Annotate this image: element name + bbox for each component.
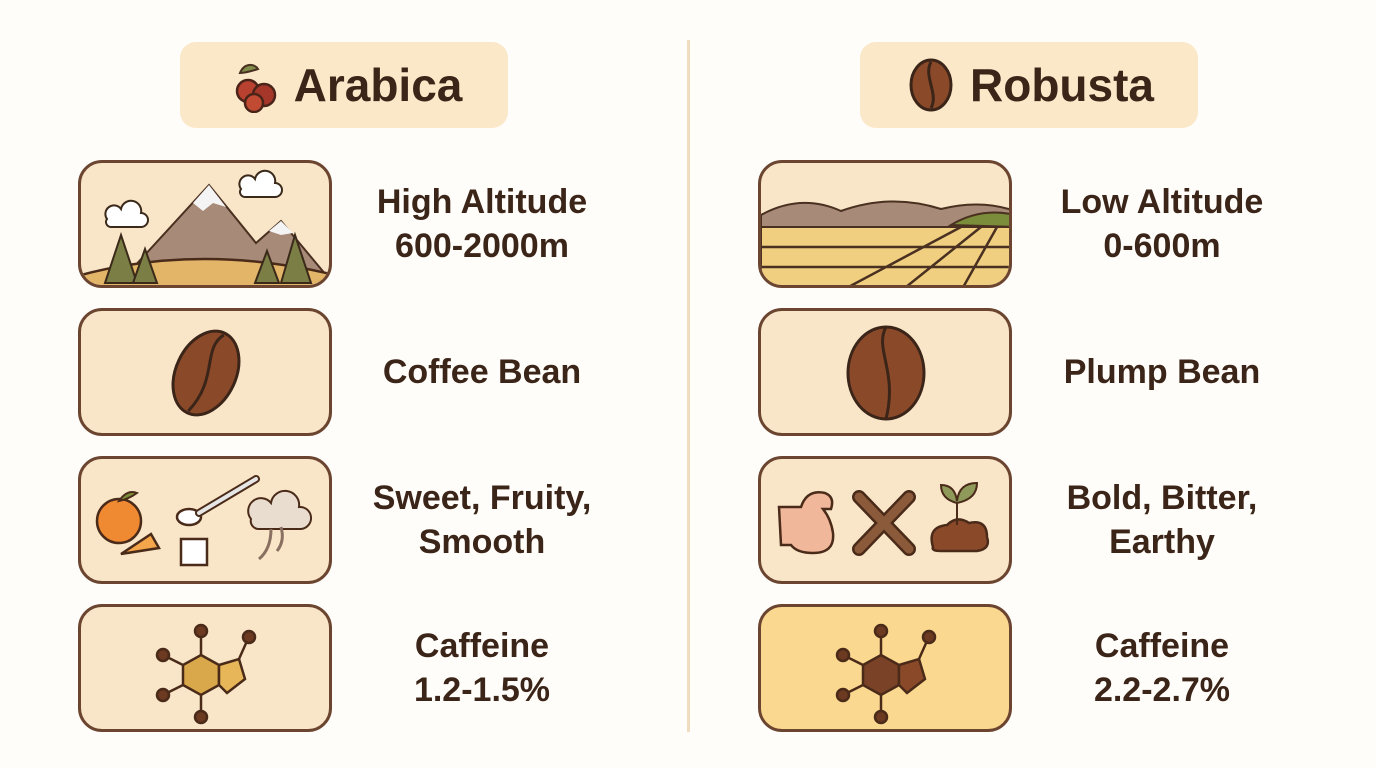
icon: bean: [910, 58, 952, 112]
text: flavor arabica: [373, 479, 591, 561]
text: plump bean: Plump Bean: [1064, 353, 1260, 391]
card: low altitude: [758, 160, 1012, 288]
text: flavor arabica: Smooth: [419, 523, 545, 561]
text: caffeine robusta: 2.2-2.7%: [1094, 671, 1230, 709]
card: flavor arabica: [78, 456, 332, 584]
text: caffeine robusta: Caffeine: [1095, 627, 1229, 665]
text: flavor robusta: Bold, Bitter,: [1067, 479, 1257, 517]
text: low altitude: Low Altitude: [1061, 183, 1263, 221]
text: caffeine arabica: [414, 627, 550, 709]
title: Arabica: [180, 42, 508, 128]
text: high altitude: High Altitude: [377, 183, 587, 221]
card: coffee bean: [78, 308, 332, 436]
text: high altitude: [377, 183, 587, 265]
text: caffeine arabica: Caffeine: [415, 627, 549, 665]
card: high altitude: [78, 160, 332, 288]
card: caffeine arabica: [78, 604, 332, 732]
title: Robusta: Robusta: [970, 59, 1154, 111]
text: flavor arabica: Sweet, Fruity,: [373, 479, 591, 517]
text: high altitude: 600-2000m: [395, 227, 569, 265]
icon: coffee cherries: [236, 64, 276, 113]
title: Arabica: Arabica: [294, 59, 462, 111]
text: low altitude: 0-600m: [1103, 227, 1221, 265]
text: flavor robusta: [1067, 479, 1257, 561]
text: caffeine robusta: [1094, 627, 1230, 709]
text: low altitude: [1061, 183, 1263, 265]
divider: [687, 40, 690, 732]
card: flavor robusta: [758, 456, 1012, 584]
text: flavor robusta: Earthy: [1109, 523, 1215, 561]
card: caffeine robusta: [758, 604, 1012, 732]
card: plump bean: [758, 308, 1012, 436]
text: coffee bean: Coffee Bean: [383, 353, 581, 391]
title: Robusta: [860, 42, 1198, 128]
text: caffeine arabica: 1.2-1.5%: [414, 671, 550, 709]
